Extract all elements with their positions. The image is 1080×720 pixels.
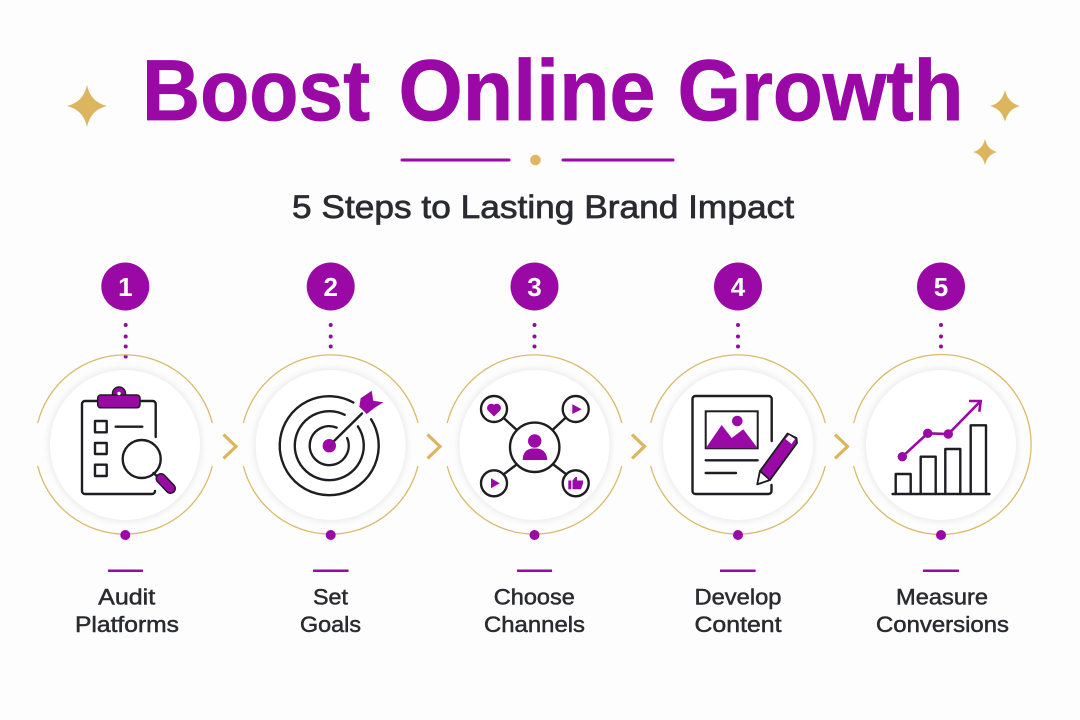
label 2	[300, 584, 361, 637]
icon frame 4	[651, 355, 825, 540]
label 5	[876, 584, 1009, 637]
label 2: Goals	[300, 612, 361, 637]
title divider	[402, 155, 673, 165]
title: Boost	[142, 43, 370, 139]
label rule 5	[923, 569, 959, 572]
label 1: Audit	[98, 584, 155, 609]
label 4: Develop	[694, 584, 782, 609]
connector dots 4	[736, 323, 740, 348]
step 3: choose channels	[447, 262, 622, 637]
title: Online	[398, 43, 656, 139]
connector dots 5	[939, 323, 943, 348]
label 3: Channels	[484, 612, 585, 637]
label rule 2	[313, 569, 348, 572]
label 1: Platforms	[75, 612, 179, 637]
arrow 1	[224, 434, 236, 458]
number badge 1: 1	[118, 272, 133, 302]
number badge 3: 3	[527, 272, 542, 302]
icon: rising bar chart	[893, 401, 989, 494]
label rule 3	[517, 569, 552, 572]
number badge 2: 2	[323, 272, 338, 302]
icon: document with pencil	[692, 396, 797, 494]
icon: target with arrow	[280, 391, 383, 495]
icon: small sparkle right	[973, 139, 997, 165]
subtitle: 5 Steps to Lasting Brand Impact	[292, 189, 794, 225]
icon: social network hub	[481, 396, 589, 496]
label 1	[75, 584, 179, 637]
number badge 3	[510, 262, 558, 310]
label rule 4	[720, 569, 756, 572]
label 2: Set	[313, 584, 348, 609]
number badge 4: 4	[731, 272, 746, 302]
number badge 5: 5	[934, 272, 948, 302]
step 4: develop content	[651, 262, 825, 637]
label 5: Conversions	[876, 612, 1009, 637]
label 4: Content	[694, 612, 782, 637]
number badge 1	[101, 262, 149, 310]
icon frame 1	[38, 355, 212, 540]
arrow 2	[428, 434, 440, 458]
connector dots 1	[124, 323, 128, 358]
number badge 5	[917, 262, 965, 310]
icon frame 5	[854, 355, 1031, 540]
number badge 2	[307, 262, 355, 310]
label 3	[484, 584, 585, 637]
icon: clipboard with magnifier	[82, 387, 170, 494]
icon frame 2	[243, 355, 418, 540]
number badge 4	[714, 262, 762, 310]
label 5: Measure	[896, 584, 988, 609]
icon frame 3	[447, 355, 622, 540]
connector dots 2	[329, 323, 333, 348]
label rule 1	[108, 569, 143, 572]
arrow 4	[835, 434, 848, 458]
title: Growth	[678, 43, 964, 139]
arrow 3	[632, 434, 644, 458]
label 4	[694, 584, 782, 637]
connector dots 3	[532, 323, 536, 348]
title	[142, 43, 964, 139]
icon: large sparkle left	[67, 85, 107, 127]
step 1: audit platforms	[38, 262, 212, 637]
step 2: set goals	[243, 262, 418, 637]
label 3: Choose	[494, 584, 575, 609]
step 5: measure conversions	[854, 262, 1031, 637]
icon: sparkle right	[990, 90, 1020, 122]
